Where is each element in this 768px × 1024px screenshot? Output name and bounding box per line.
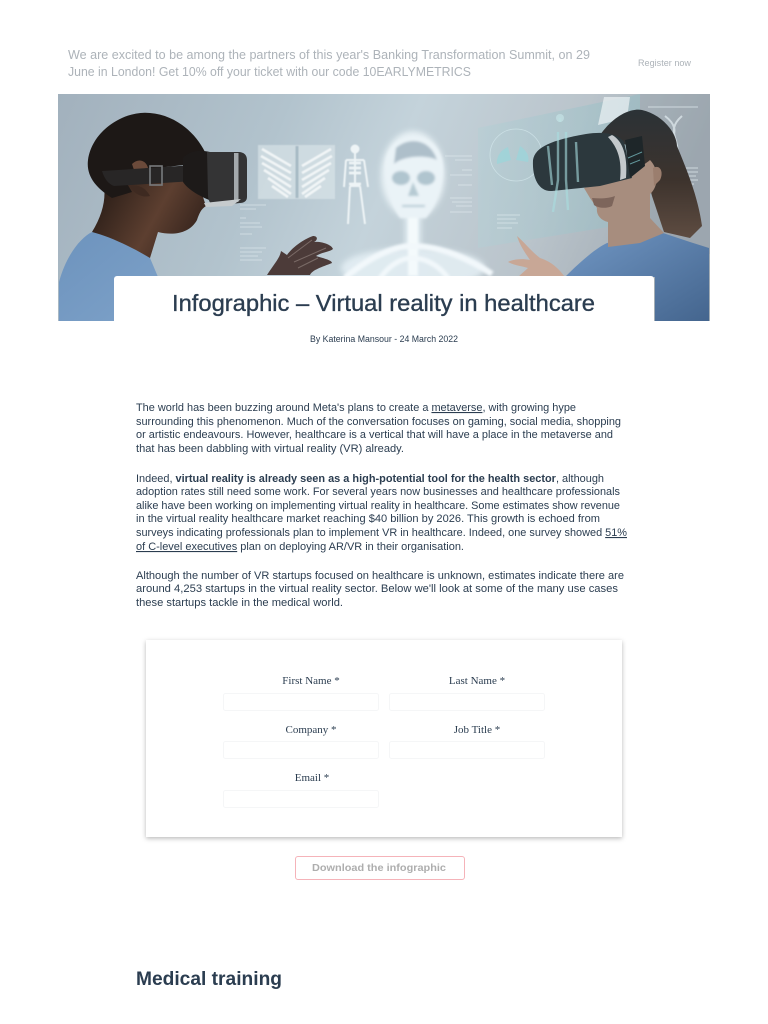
icon: male doctor's hand <box>267 236 333 275</box>
byline: By Katerina Mansour - 24 March 2022 <box>310 334 458 344</box>
field: job title: Job Title * <box>454 724 500 736</box>
right panel: DNA graphic <box>648 107 698 184</box>
title: Infographic – Virtual reality in healthcare <box>172 290 595 316</box>
icon: female doctor's hand <box>508 236 565 277</box>
field: job title <box>390 724 544 758</box>
field: company <box>224 724 378 758</box>
intro paragraph 1 <box>136 402 621 455</box>
field: first name <box>224 675 378 710</box>
download button <box>296 856 464 880</box>
intro paragraph 1: that has been dabbling with virtual reality (VR) already. <box>136 443 404 455</box>
intro paragraph 1: or artistic endeavours. However, healthcare is a vertical that will have a place in the metaverse and <box>136 429 613 441</box>
person: female doctor with VR headset <box>533 110 709 321</box>
section heading: medical training: Medical training <box>136 969 282 990</box>
intro paragraph 3: these startups tackle in the medical world. <box>136 597 343 609</box>
person: male doctor with VR headset <box>59 113 247 321</box>
intro paragraph 1: The world has been buzzing around Meta's plans to create a metaverse, with growing hype <box>136 402 576 414</box>
icon: small skeleton hologram <box>344 146 368 224</box>
intro paragraph 2: Indeed, virtual reality is already seen as a high-potential tool for the health sector, although <box>136 473 604 485</box>
intro paragraph 2: surveys indicating professionals plan to implement VR in healthcare. Indeed, one survey showed 51% <box>136 527 627 539</box>
icon: large skull and skeleton hologram <box>341 131 492 288</box>
skeleton projected on the visor <box>548 118 578 212</box>
field: email <box>224 772 378 808</box>
field: email: Email * <box>295 772 329 784</box>
intro paragraph 3: Although the number of VR startups focused on healthcare is unknown, estimates indicate there are <box>136 570 624 582</box>
field: first name: First Name * <box>282 675 340 687</box>
intro paragraph 2: adoption rates still need some work. For several years now businesses and healthcare professionals <box>136 486 620 498</box>
intro paragraph 2: in the virtual reality healthcare market reaching $40 billion by 2026. This growth is echoed from <box>136 513 600 525</box>
icon: ribcage hologram <box>258 145 335 199</box>
hologram data text lines <box>240 156 472 260</box>
ear <box>132 160 148 169</box>
intro paragraph 1: surrounding this phenomenon. Much of the conversation focuses on gaming, social media, shopping <box>136 416 621 428</box>
panel: download form <box>146 640 622 837</box>
hologram glass panel <box>490 94 707 240</box>
intro paragraph 2: alike have been working on implementing virtual reality in healthcare. Some estimates show revenue <box>136 500 620 512</box>
field: last name <box>390 675 544 710</box>
promo banner text: June in London! Get 10% off your ticket with our code 10EARLYMETRICS <box>68 65 471 79</box>
field: last name: Last Name * <box>449 675 505 687</box>
title card <box>114 276 654 326</box>
intro paragraph 3: around 4,253 startups in the virtual reality sector. Below we'll look at some of the many use cases <box>136 583 619 595</box>
intro paragraph 3 <box>136 570 624 609</box>
field: company: Company * <box>285 724 337 736</box>
promo banner text: We are excited to be among the partners of this year's Banking Transformation Summit, on 29 <box>68 48 590 62</box>
intro paragraph 2 <box>136 473 627 553</box>
promo banner text <box>68 48 590 79</box>
register now link: Register now <box>638 58 691 68</box>
hero image: VR in healthcare <box>58 94 710 321</box>
download button: Download the infographic <box>312 862 446 874</box>
intro paragraph 2: of C-level executives plan on deploying AR/VR in their organisation. <box>136 541 464 553</box>
